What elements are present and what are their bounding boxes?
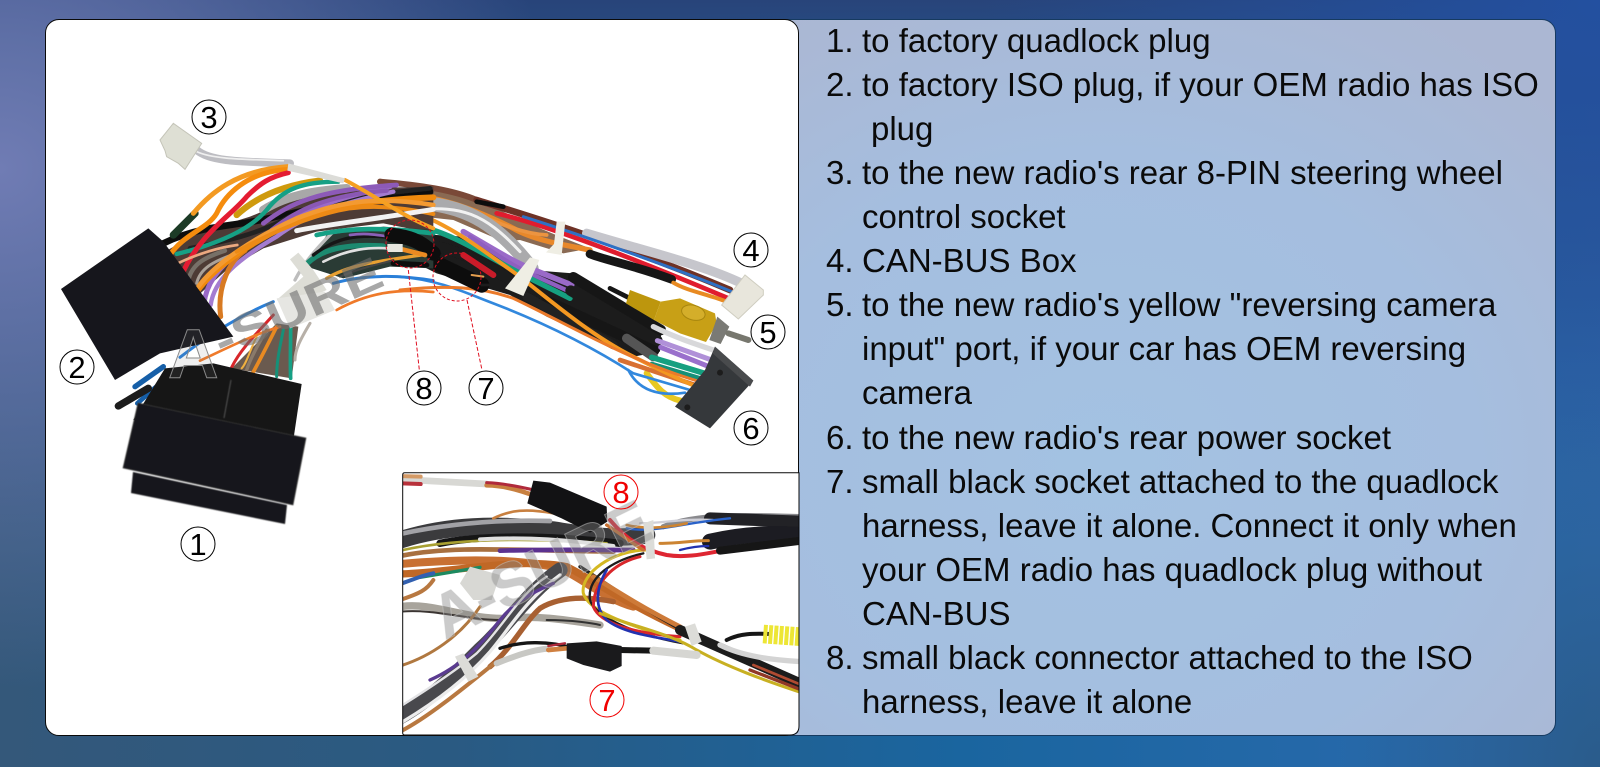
text: item 7: your OEM radio has quadlock plug without [862,551,1482,588]
zip tie: upper branch [546,222,565,255]
connector 6: power socket [675,347,753,428]
wire bundle: to ISO plug [163,167,433,317]
wire bundle: lower arc [400,277,697,394]
connector 5: yellow RCA plug [626,290,748,344]
inset: zip ties [455,520,702,682]
text: item 2: plug [871,110,933,147]
inset: black connector 8 [527,481,607,533]
text: item 3 [826,154,1503,235]
bundle fill: lower fan-out [232,323,298,378]
red label 7 [590,683,624,718]
text: item 2: 2. [826,66,854,103]
zip tie and label tape [277,253,335,328]
connector 1 upper body [133,363,302,440]
connector 1: quadlock plug [123,380,306,524]
text: item 5 [826,286,1496,411]
text: item 2 [826,66,1539,147]
text: item 3: control socket [862,198,1066,235]
label 5 [751,315,785,350]
inset: black connector 7 [567,641,622,672]
label 1: 1 [189,527,207,562]
label 7: 7 [477,371,495,406]
text: item 1: to factory quadlock plug [862,22,1211,59]
inset: yellow blue red loop [583,550,680,640]
label 3: 3 [200,100,218,135]
watermark letter A: A [168,315,219,393]
connector 3: white steering plug [160,123,202,169]
label 6: 6 [742,411,760,446]
bundle fill: upper [165,187,433,297]
photo: right half of harness [380,182,763,428]
label 7 [469,371,503,406]
inset: right side wires [680,630,802,684]
text: item 7 [826,463,1517,632]
text: item 7: harness, leave it alone. Connect it only when [862,507,1517,544]
inset: grey ribbon and thin wires [400,606,600,625]
text: item 5: camera [862,374,972,411]
text: item 6: to the new radio's rear power socket [862,419,1391,456]
label: red circled numbers on inset [590,475,638,718]
inset photo: connectors 7 and 8 close-up [400,473,802,735]
inset: white purple bundle [400,570,560,717]
text: item 4: CAN-BUS Box [862,242,1077,279]
panel: text list background [780,19,1556,736]
label 1 [181,527,215,562]
text: item 8 [826,639,1473,720]
label 2: 2 [68,350,86,385]
label 8 [407,371,441,406]
inset: lower connector wire [500,643,573,648]
red dashed circle and leader for 8 [386,220,434,370]
label 5: 5 [759,315,777,350]
text: item 7: small black socket attached to the quadlock [862,463,1499,500]
label: circled numbers on main photo [60,100,785,562]
text: item 3: 3. [826,154,854,191]
watermark: main photo [168,246,391,393]
text: item 3: to the new radio's rear 8-PIN steering wheel [862,154,1503,191]
text: item 7: CAN-BUS [862,595,1011,632]
label 6 [734,411,768,446]
label 3 [192,100,226,135]
red label 8: 8 [612,475,630,510]
small white connector in cluster [387,244,403,252]
watermark: inset photo: A-SURE [421,488,662,653]
text: item 4: 4. [826,242,854,279]
bundle fill: upper center [407,185,590,253]
text: item 7: 7. [826,463,854,500]
label 4: 4 [742,233,760,268]
blue and orange lower arc [180,277,433,361]
text: item 1: 1. [826,22,854,59]
panel: photo background [45,19,799,736]
gray ribbon to connector 3 [197,150,290,163]
text: item 8: harness, leave it alone [862,683,1192,720]
text: item 6: 6. [826,419,854,456]
wire bundle: center cluster [295,229,433,280]
small black connector 7 [440,255,503,285]
wiring harness diagram [60,100,800,736]
inset panel background [788,473,798,734]
text: item 8: small black connector attached to the ISO [862,639,1473,676]
label 2 [60,350,94,385]
red label 8 [604,475,638,510]
inset: yellow RCA boot [763,634,801,637]
inset border [403,473,799,735]
text: item 5: input" port, if your car has OEM reversing [862,330,1466,367]
wire bundle: upper right branch [380,182,742,301]
bundle fill: black lower [410,233,662,357]
red label 7: 7 [598,683,616,718]
connector 4: CAN-BUS white plug [722,275,763,319]
photo: left half of harness [61,123,434,440]
inset: upper right bundle [663,516,802,527]
wires: lower fan-out [232,315,310,378]
inset: grey black bundle [400,526,647,540]
wire bundle: center to power socket [393,202,713,401]
label 4 [734,233,768,268]
tape on top of harness [287,163,345,183]
text: item 2: to factory ISO plug, if your OEM radio has ISO [862,66,1539,103]
inset: top wire to black connector 8 [400,479,487,484]
zip tie: lower branch [505,257,539,296]
label 8: 8 [415,371,433,406]
red dashed circle and leader for 7 [433,253,482,370]
text: item 8: 8. [826,639,854,676]
blue tips and black stub [118,367,163,406]
watermark letters SURE: -SURE [205,246,391,367]
text: item 5: 5. [826,286,854,323]
text: item 5: to the new radio's yellow "reversing camera [862,286,1496,323]
inset: wire label [460,567,500,600]
connector 2: ISO black plug [61,228,233,380]
bundle fill: center cluster [307,227,433,278]
